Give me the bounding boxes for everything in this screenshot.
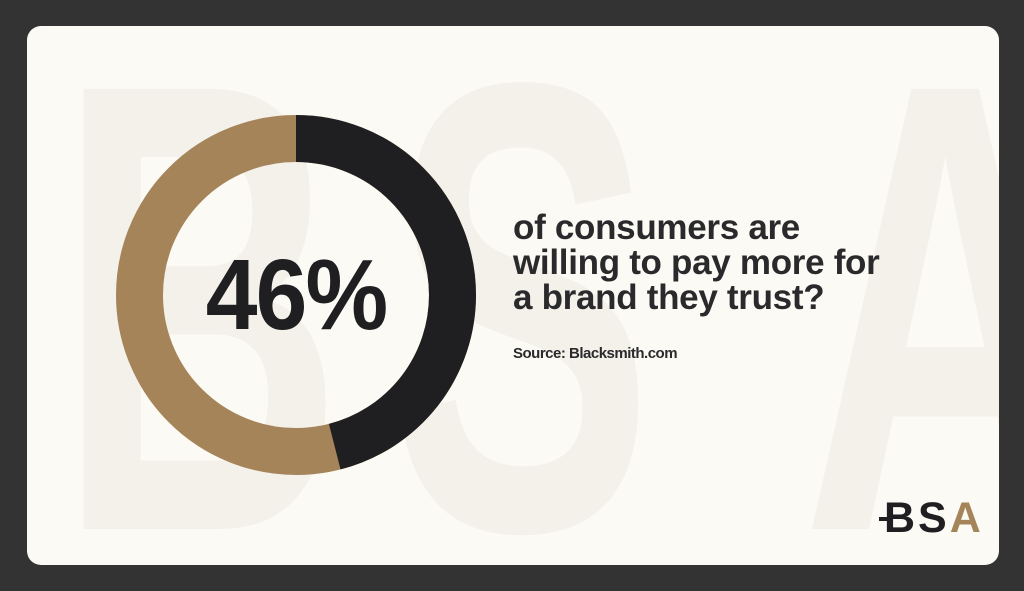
statement text	[512, 208, 880, 317]
source text: Source: Blacksmith.com	[513, 345, 677, 362]
donut: gold remainder	[140, 138, 452, 452]
logo crossbar	[879, 517, 889, 521]
percentage value: 46%	[206, 239, 386, 351]
donut: 46% dark segment	[140, 138, 452, 452]
statement text: willing to pay more for	[513, 243, 879, 282]
logo BSA: BSA	[884, 494, 984, 542]
statement text: a brand they trust?	[513, 278, 824, 317]
statement text: of consumers are	[513, 208, 800, 247]
